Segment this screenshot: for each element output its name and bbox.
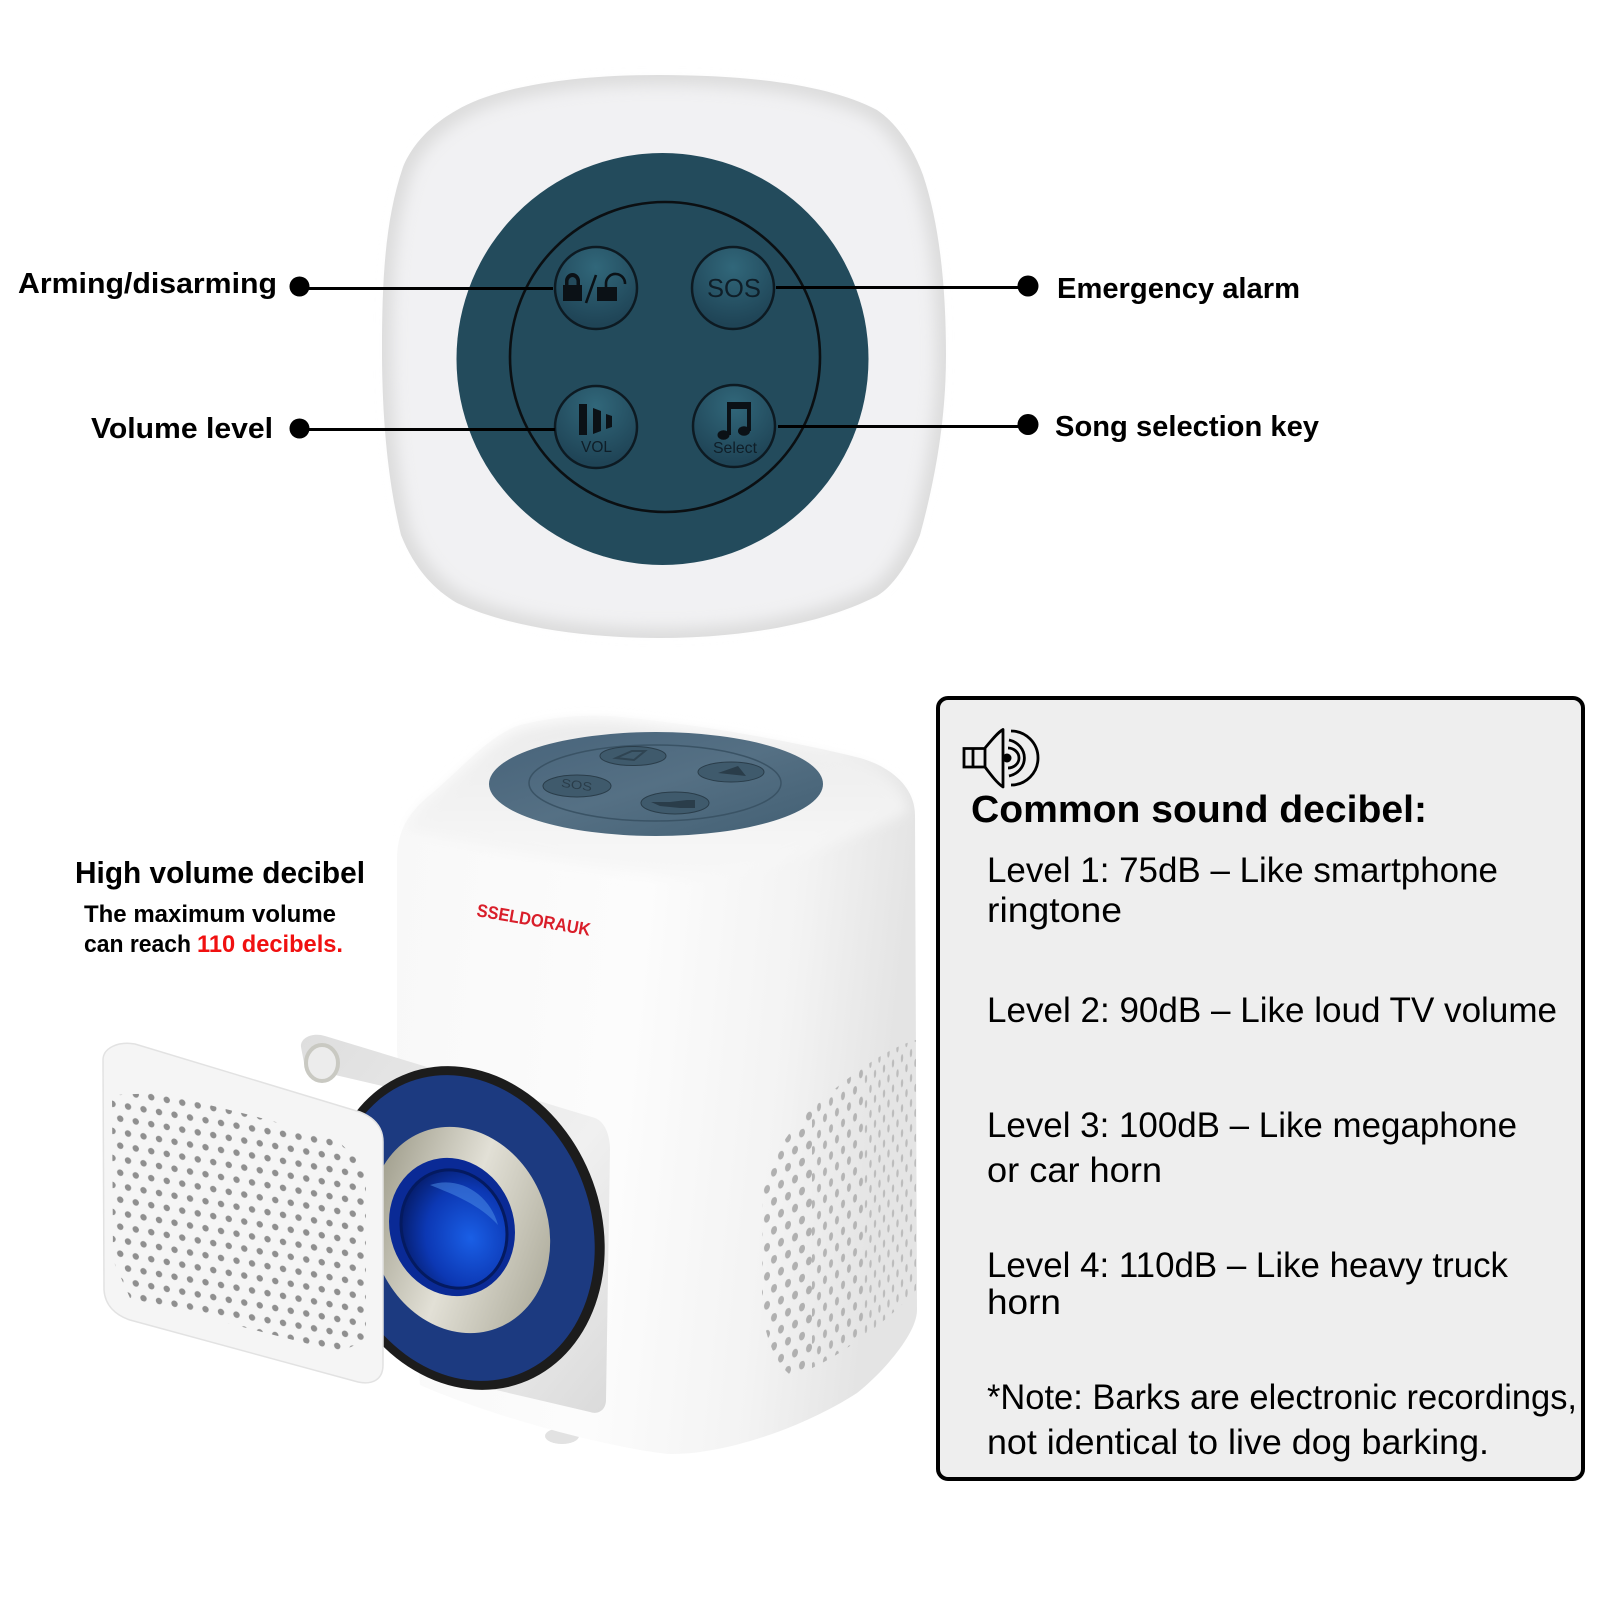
icon: loudspeaker: [964, 730, 1038, 787]
level 3: or car horn: [987, 1151, 1162, 1190]
level 2: Level 2: 90dB – Like loud TV volume: [987, 991, 1557, 1030]
heading: high volume decibel: [75, 855, 365, 958]
maximum volume text: The maximum volume: [84, 901, 336, 928]
button: arm / disarm: [555, 247, 637, 329]
button: volume: [555, 386, 637, 468]
callout: song selection key: [778, 411, 1319, 443]
callout: emergency alarm: [776, 273, 1300, 305]
foot: [545, 1428, 579, 1444]
callout: volume level: Volume level: [91, 413, 273, 445]
speaker product: [103, 716, 917, 1454]
button: song select: [693, 385, 775, 467]
level 3: [987, 1106, 1517, 1190]
callout: volume level: [91, 413, 555, 445]
side sound holes: [760, 1030, 916, 1380]
speaker grille cover: [103, 1043, 383, 1383]
callout: song selection key: Song selection key: [1055, 411, 1319, 443]
top dial: [489, 732, 823, 836]
top dial: SOS: [560, 776, 593, 794]
level 1: Level 1: 75dB – Like smartphone: [987, 851, 1498, 890]
button: volume: VOL: [581, 439, 612, 456]
callout: emergency alarm: Emergency alarm: [1057, 273, 1300, 305]
maximum volume text: can reach: [84, 931, 191, 958]
button: SOS: [692, 247, 774, 329]
callout: arming/disarming: [18, 268, 553, 300]
top cap shading: [405, 721, 908, 880]
brand name: SSELDORAUK: [475, 900, 592, 940]
level 4: Level 4: 110dB – Like heavy truck: [987, 1246, 1508, 1285]
callout: arming/disarming: Arming/disarming: [18, 268, 277, 300]
button: SOS: SOS: [707, 273, 761, 303]
body: [397, 716, 917, 1454]
heading: high volume decibel: High volume decibel: [75, 855, 365, 890]
button: song select: Select: [713, 440, 758, 457]
top view device: [382, 75, 946, 638]
level 1: [987, 851, 1498, 930]
maximum volume text: [84, 901, 343, 958]
panel heading: Common sound decibel:: [971, 789, 1427, 831]
level 4: [987, 1246, 1508, 1322]
level 3: Level 3: 100dB – Like megaphone: [987, 1106, 1517, 1145]
maximum volume text: 110 decibels.: [197, 931, 343, 958]
control dial: [456, 153, 868, 565]
note: not identical to live dog barking.: [987, 1423, 1489, 1462]
level 1: ringtone: [987, 891, 1122, 930]
panel: common sound decibel: [938, 698, 1583, 1479]
note: *Note: Barks are electronic recordings,: [987, 1378, 1577, 1417]
speaker driver: [281, 1026, 649, 1430]
note: [987, 1378, 1577, 1462]
level 4: horn: [987, 1283, 1061, 1322]
